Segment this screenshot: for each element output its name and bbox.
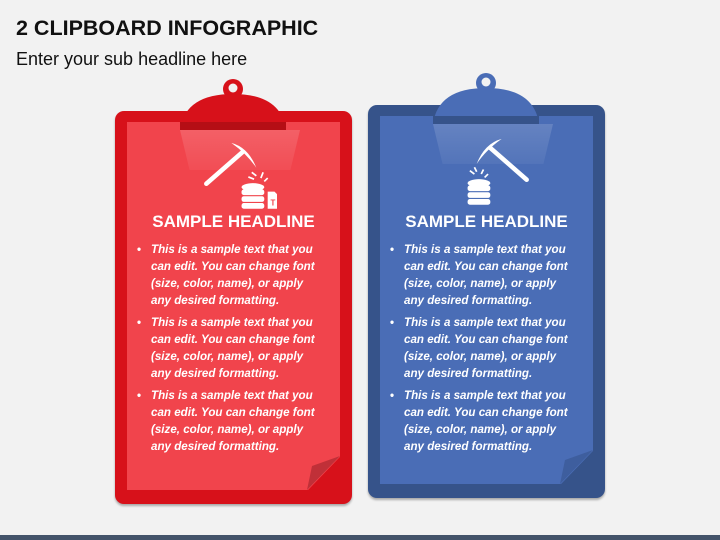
- bullet list: (size, color, name), or apply: [151, 277, 303, 290]
- bullet list: This is a sample text that you: [151, 243, 313, 256]
- bullet list: any desired formatting.: [404, 294, 532, 307]
- bullet list: (size, color, name), or apply: [404, 350, 556, 363]
- panel: blue clipboard: [368, 105, 605, 498]
- panel: red clipboard: [115, 111, 352, 504]
- clip: blue: [433, 73, 539, 124]
- icon: pickaxe and database: T: [271, 198, 276, 207]
- page curl: [307, 456, 340, 490]
- bullet list: (size, color, name), or apply: [151, 423, 303, 436]
- icon: pickaxe and database: [468, 139, 529, 205]
- bullet list: This is a sample text that you: [151, 389, 313, 402]
- bullet list: can edit. You can change font: [151, 406, 315, 419]
- bullet list: [137, 244, 315, 452]
- headline: SAMPLE HEADLINE: [405, 212, 568, 231]
- bullet list: any desired formatting.: [151, 367, 279, 380]
- bullet list: can edit. You can change font: [151, 260, 315, 273]
- clip: red: [180, 79, 286, 130]
- bullet list: This is a sample text that you: [404, 243, 566, 256]
- bullet list: can edit. You can change font: [404, 260, 568, 273]
- bullet list: can edit. You can change font: [404, 333, 568, 346]
- bullet list: any desired formatting.: [404, 367, 532, 380]
- bullet list: [390, 244, 568, 452]
- bullet list: any desired formatting.: [151, 294, 279, 307]
- footer bar: [0, 535, 720, 540]
- bullet list: (size, color, name), or apply: [151, 350, 303, 363]
- bullet list: (size, color, name), or apply: [404, 277, 556, 290]
- bullet list: This is a sample text that you: [404, 316, 566, 329]
- bullet list: (size, color, name), or apply: [404, 423, 556, 436]
- bullet list: any desired formatting.: [404, 440, 532, 453]
- page curl: [560, 450, 593, 484]
- bullet list: This is a sample text that you: [404, 389, 566, 402]
- bullet list: can edit. You can change font: [404, 406, 568, 419]
- subtitle: Enter your sub headline here: [16, 49, 247, 69]
- bullet list: any desired formatting.: [151, 440, 279, 453]
- bullet list: This is a sample text that you: [151, 316, 313, 329]
- bullet list: can edit. You can change font: [151, 333, 315, 346]
- headline: SAMPLE HEADLINE: [152, 212, 315, 231]
- blue paper: [380, 116, 593, 484]
- title: 2 CLIPBOARD INFOGRAPHIC: [16, 16, 318, 40]
- red paper: [127, 122, 340, 490]
- icon: pickaxe and database: [204, 143, 277, 209]
